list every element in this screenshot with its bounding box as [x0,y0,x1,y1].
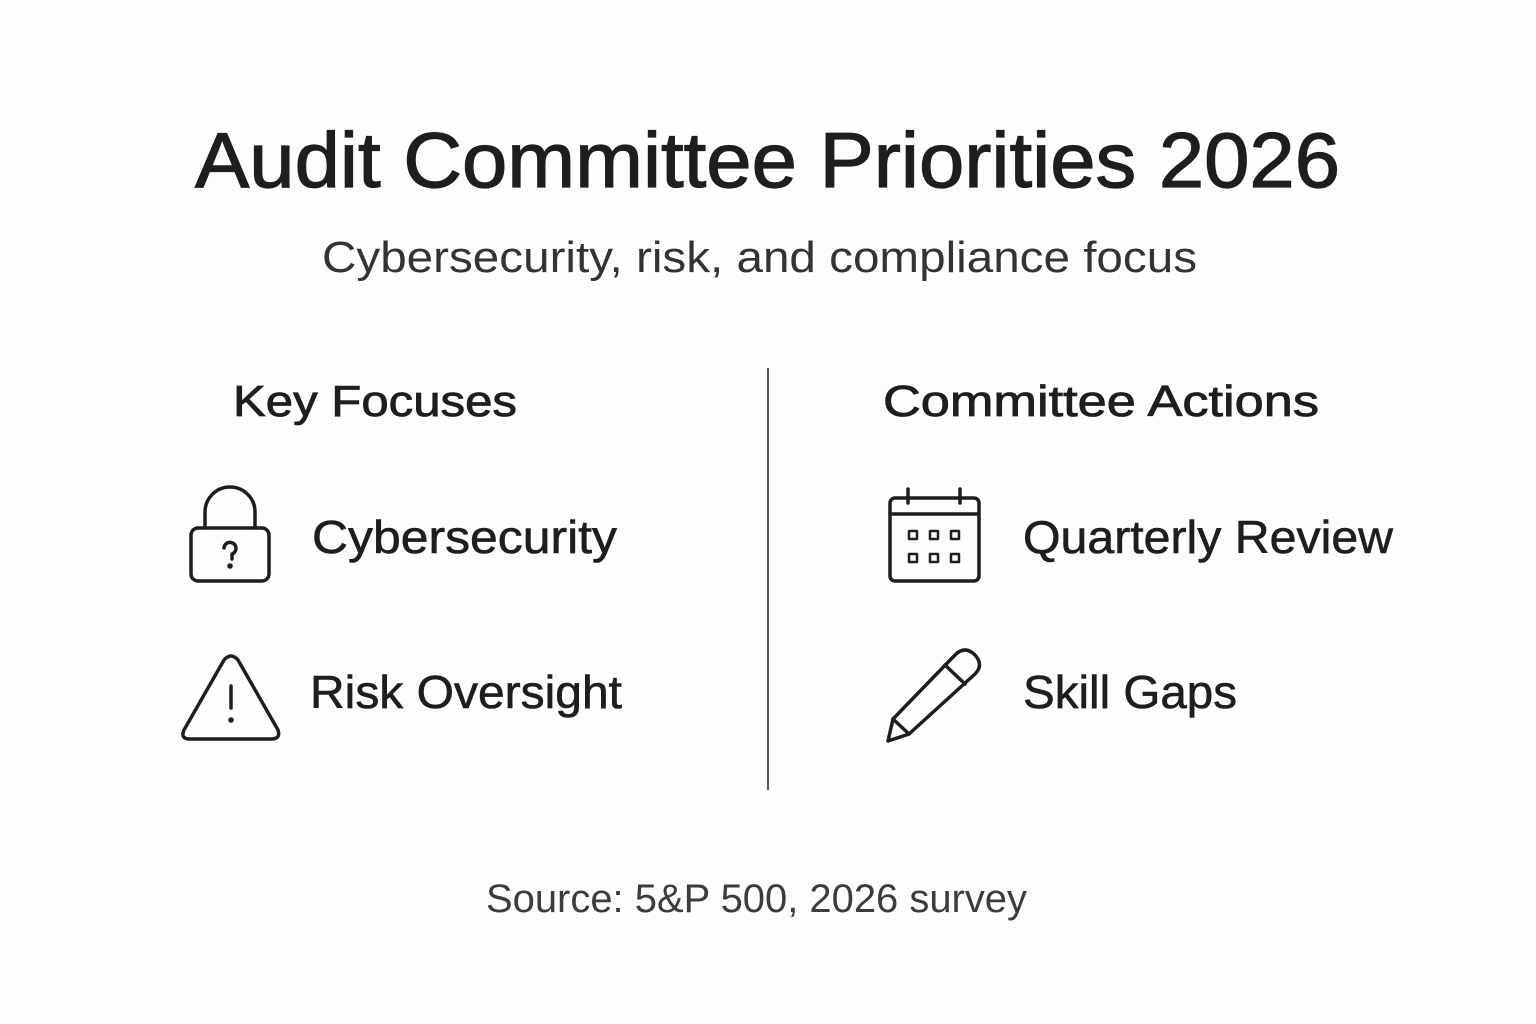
subtitle: Cybersecurity, risk, and compliance focus [322,233,1197,282]
heading: key focuses: Key Focuses [233,377,517,426]
icon: pencil [888,650,980,741]
icon: warning triangle [183,656,279,739]
heading: committee actions: Committee Actions [883,377,1319,426]
label: cybersecurity: Cybersecurity [312,511,617,563]
label: skill gaps: Skill Gaps [1023,666,1237,718]
divider [767,368,769,790]
label: risk oversight: Risk Oversight [310,666,622,718]
panel: key focuses [183,377,622,739]
title: Audit Committee Priorities 2026 [195,116,1340,204]
panel: committee actions [883,377,1394,741]
label: quarterly review: Quarterly Review [1023,511,1394,563]
icon: lock [191,487,269,581]
icon: calendar [890,489,979,581]
source note: Source: 5&P 500, 2026 survey [486,877,1027,921]
